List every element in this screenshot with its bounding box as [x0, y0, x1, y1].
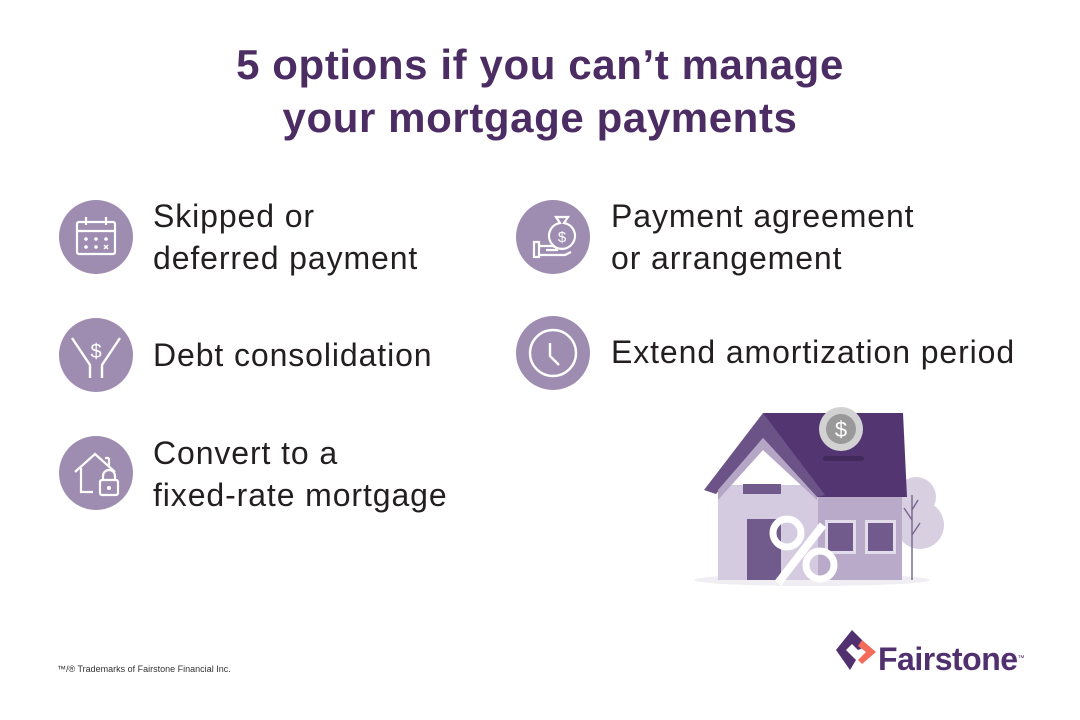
logo: Fairstone: [836, 630, 1024, 677]
text: skipped: [153, 198, 418, 276]
title: your mortgage payments: [282, 94, 798, 141]
icon: money bag hand: $: [558, 229, 567, 246]
illustration: house: $: [835, 417, 847, 442]
footnote: ™/® Trademarks of Fairstone Financial Inc.: [57, 664, 231, 674]
icon: clock: [516, 316, 590, 390]
text: skipped: deferred payment: [153, 240, 418, 276]
icon: money bag hand: [516, 200, 590, 274]
text: payment agreement: or arrangement: [611, 240, 842, 276]
text: debt: Debt consolidation: [153, 337, 432, 373]
icon: funnel dollar: [59, 318, 133, 392]
icon: calendar: [59, 200, 133, 274]
text: skipped: Skipped or: [153, 198, 315, 234]
text: convert: Convert to a: [153, 435, 338, 471]
logo: Fairstone: Fairstone™: [878, 641, 1024, 677]
title: [236, 41, 844, 141]
text: convert: fixed-rate mortgage: [153, 477, 448, 513]
text: extend: Extend amortization period: [611, 334, 1015, 370]
text: convert: [153, 435, 448, 513]
icon: funnel dollar: $: [90, 341, 102, 363]
illustration: house: [694, 407, 944, 586]
text: payment agreement: Payment agreement: [611, 198, 914, 234]
text: payment agreement: [611, 198, 914, 276]
title: 5 options if you can’t manage: [236, 41, 844, 88]
icon: house lock: [59, 436, 133, 510]
